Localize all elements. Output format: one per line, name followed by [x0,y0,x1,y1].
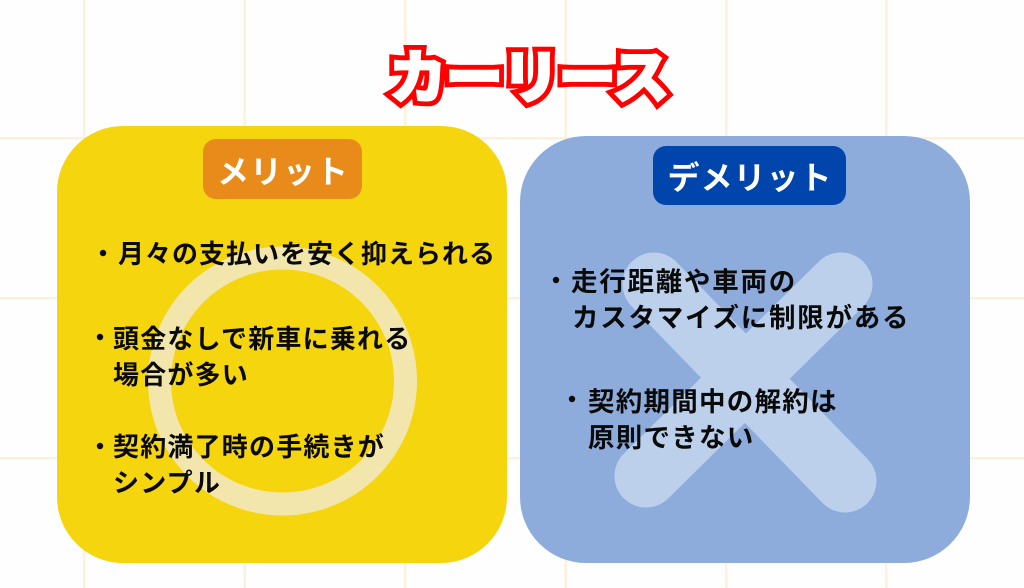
merit item 2 [97,324,411,390]
panel background: blue [520,136,970,563]
heading badge: demerits: デメリット [667,160,833,196]
merit item 3: 契約満了時の手続きが [113,432,385,462]
merit item 3 [97,432,385,498]
heading badge: merits: メリット [217,154,349,190]
demerit item 2: 原則できない [588,423,754,453]
heading badge: merits [203,139,362,199]
merit item 1: 月々の支払いを安く抑えられる [118,239,496,269]
demerit item 1 [553,267,910,333]
demerit item 2 [569,387,838,453]
merit item 2: 場合が多い [113,360,249,390]
icon: circle [160,258,406,504]
panel: merits [57,126,507,563]
demerit item 2: 契約期間中の解約は [588,387,838,417]
demerit item 1: 走行距離や車両の [571,267,797,297]
heading badge: demerits [653,146,846,205]
panel background: yellow [57,126,507,563]
title: カーリース [389,46,668,111]
panel: demerits [520,136,970,563]
title: カーリース [389,46,668,111]
merit item 3: シンプル [113,468,221,498]
icon: cross [646,284,845,481]
merit item 2: 頭金なしで新車に乗れる [113,324,411,354]
demerit item 1: カスタマイズに制限がある [572,303,910,333]
